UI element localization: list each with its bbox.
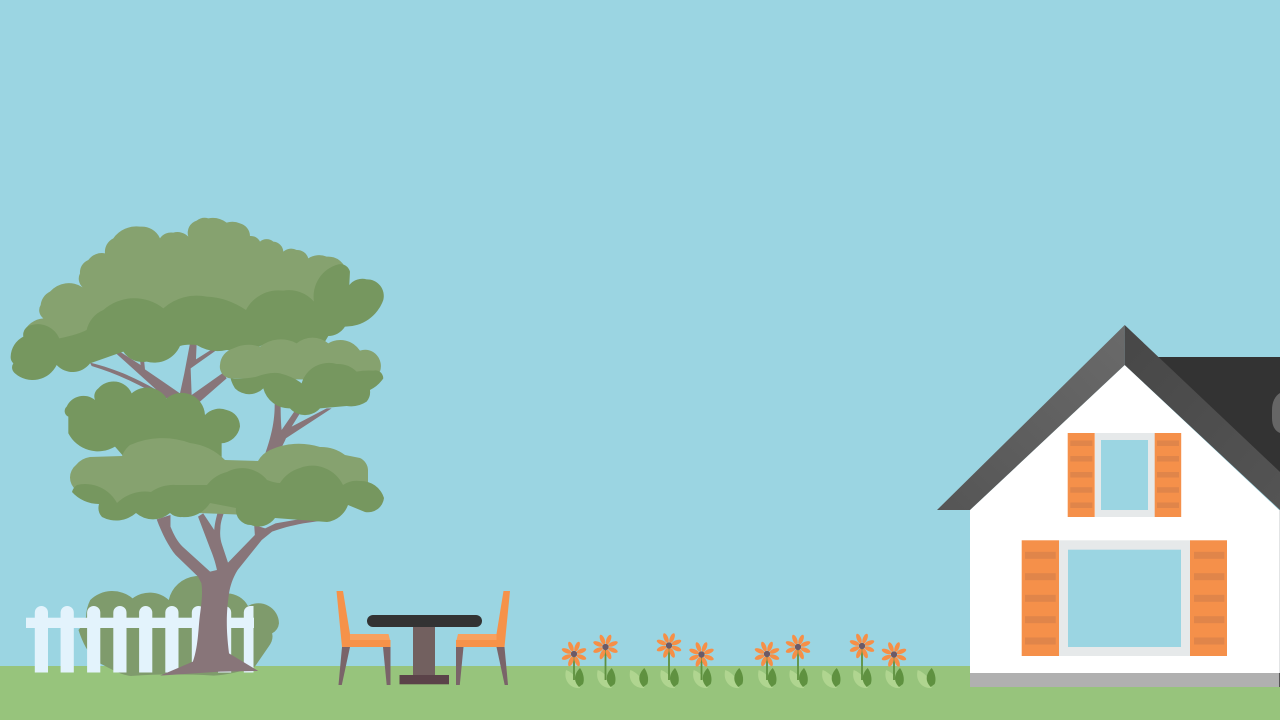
upper branches — [90, 343, 332, 463]
right roof edge — [1125, 325, 1280, 510]
white picket fence — [26, 606, 254, 672]
table — [367, 615, 482, 684]
canopy: lower light layer — [70, 438, 368, 515]
canopy: lower dark layer — [72, 466, 384, 527]
leaf pairs — [565, 668, 936, 688]
lower window — [1022, 540, 1227, 656]
upper window — [1068, 433, 1181, 517]
canopy: top dark layer — [11, 264, 384, 380]
dark rear roof — [1157, 357, 1280, 480]
tree trunk and lower limbs — [157, 508, 322, 676]
flower stems — [574, 646, 894, 680]
canopy: middle right dark layer — [231, 363, 383, 415]
bush behind fence — [79, 576, 279, 676]
canopy: top light layer — [23, 218, 347, 340]
right chair — [456, 591, 510, 685]
upper left shutter — [1068, 433, 1095, 517]
canopy: middle right light layer — [220, 338, 381, 380]
upper right shutter — [1155, 433, 1181, 517]
lower left shutter — [1022, 540, 1059, 656]
canopy: middle left cluster — [65, 381, 240, 460]
lower right shutter — [1190, 540, 1227, 656]
left chair — [336, 591, 390, 685]
chimney or vent detail — [1272, 393, 1280, 433]
orange flower heads — [561, 632, 907, 668]
white house wall — [970, 365, 1279, 673]
flower bed — [561, 632, 936, 688]
house — [937, 325, 1280, 687]
left roof edge — [937, 325, 1125, 510]
tree — [11, 218, 384, 676]
table and chairs — [336, 591, 510, 685]
foundation — [970, 673, 1279, 687]
grass ground — [0, 666, 1280, 720]
